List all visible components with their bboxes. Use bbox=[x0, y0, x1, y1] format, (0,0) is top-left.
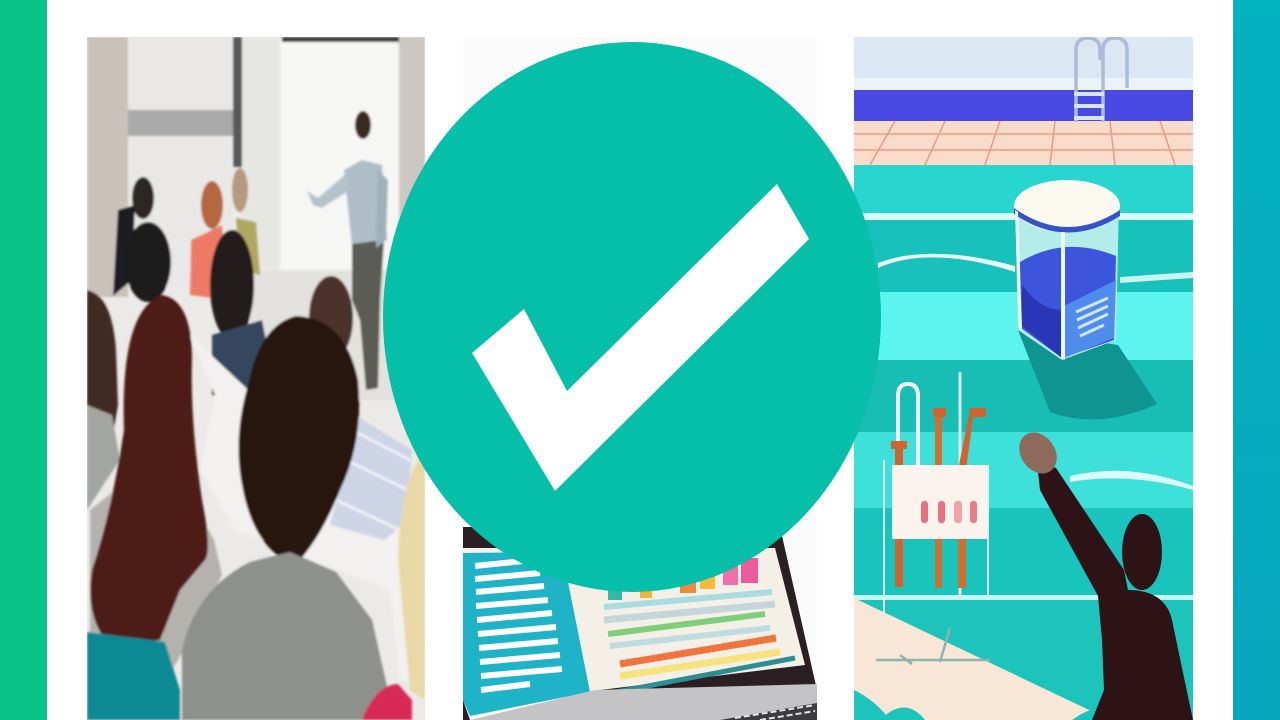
panel: report on laptop illustration bbox=[463, 527, 817, 720]
striped shirt person bbox=[330, 412, 412, 540]
water bands bbox=[854, 165, 1193, 720]
pool deck tiles bbox=[854, 121, 1193, 165]
teal chair bbox=[87, 632, 180, 720]
colour bars chart bbox=[604, 558, 795, 692]
left front hair and sweater bbox=[87, 290, 118, 440]
seated audience back row bbox=[112, 166, 354, 396]
ladder bbox=[1074, 38, 1127, 122]
room background bbox=[87, 37, 425, 407]
swimmer silhouette bbox=[1011, 425, 1193, 720]
test kit bbox=[883, 372, 989, 613]
left green side band bbox=[0, 0, 47, 720]
presenter bbox=[307, 111, 388, 390]
teal document bbox=[463, 552, 590, 716]
white tables bbox=[188, 334, 406, 660]
laptop keyboard bbox=[470, 684, 817, 720]
right teal side band bbox=[1233, 0, 1280, 720]
panel: swimming pool illustration bbox=[854, 37, 1195, 720]
icon: white check mark bbox=[472, 184, 809, 491]
front person bbox=[239, 316, 359, 565]
water splash bbox=[1072, 710, 1095, 720]
laptop screen bbox=[463, 527, 817, 720]
pool deck corner bbox=[854, 598, 1110, 720]
beaker shadow bbox=[1018, 330, 1157, 419]
chemical beaker bbox=[1014, 180, 1120, 360]
test kit stand base bbox=[876, 628, 990, 664]
blonde hair edge bbox=[398, 450, 425, 700]
panel: classroom photo bbox=[87, 37, 425, 720]
pool wall bbox=[854, 37, 1193, 121]
badge: green check circle bbox=[383, 42, 881, 592]
